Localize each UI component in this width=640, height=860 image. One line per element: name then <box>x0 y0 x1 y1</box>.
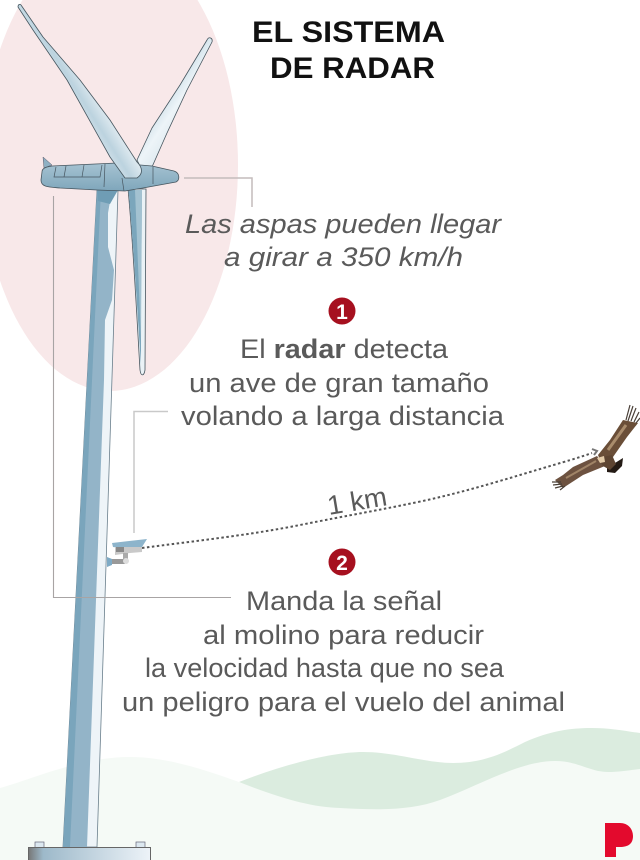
step 2 badge <box>328 548 356 576</box>
tower <box>63 190 118 847</box>
tail <box>607 458 623 473</box>
title: DE RADAR <box>270 52 435 85</box>
step 2 text <box>122 586 565 717</box>
step 2 text: un peligro para el vuelo del animal <box>122 687 565 717</box>
wind turbine <box>18 4 212 860</box>
back green hill <box>239 728 640 830</box>
front pale hill <box>0 757 640 860</box>
caption: blade speed: Las aspas pueden llegar <box>185 209 502 239</box>
title <box>252 16 445 85</box>
nacelle <box>41 157 179 191</box>
blade: upper right <box>137 38 212 170</box>
logo <box>605 823 633 857</box>
step 1 text: un ave de gran tamaño <box>189 368 489 398</box>
caption: blade speed: a girar a 350 km/h <box>224 242 463 272</box>
blade: upper left <box>18 4 142 178</box>
leader line: nacelle to step 2 <box>54 196 231 598</box>
step 2 badge: 2 <box>336 552 348 575</box>
tower base <box>28 842 150 860</box>
step 2 text: la velocidad hasta que no sea <box>145 653 505 683</box>
step 2 text: Manda la señal <box>246 586 442 616</box>
left wing feathers <box>552 482 565 490</box>
leader line: rotor to caption <box>184 178 252 207</box>
step 1 text <box>181 334 505 431</box>
distance label: 1 km <box>325 481 389 521</box>
body <box>598 455 616 470</box>
step 1 text: volando a larga distancia <box>181 401 505 431</box>
arrow tip of distance line <box>592 449 597 455</box>
icon: eagle <box>552 405 640 490</box>
left wing <box>555 456 605 488</box>
blade: lower <box>128 189 146 375</box>
icon: radar camera <box>107 539 147 567</box>
leader line: radar to step 1 <box>134 412 168 533</box>
dotted distance line <box>142 453 592 548</box>
step 2 text: al molino para reducir <box>203 620 484 650</box>
caption: blade speed <box>185 209 502 272</box>
pink background ellipse <box>0 0 238 391</box>
step 1 text: El radar detecta <box>240 334 449 364</box>
right wing <box>598 420 638 460</box>
right wing feathers <box>626 405 640 423</box>
step 1 badge <box>328 298 356 324</box>
step 1 badge: 1 <box>336 301 348 324</box>
title: EL SISTEMA <box>252 16 445 49</box>
